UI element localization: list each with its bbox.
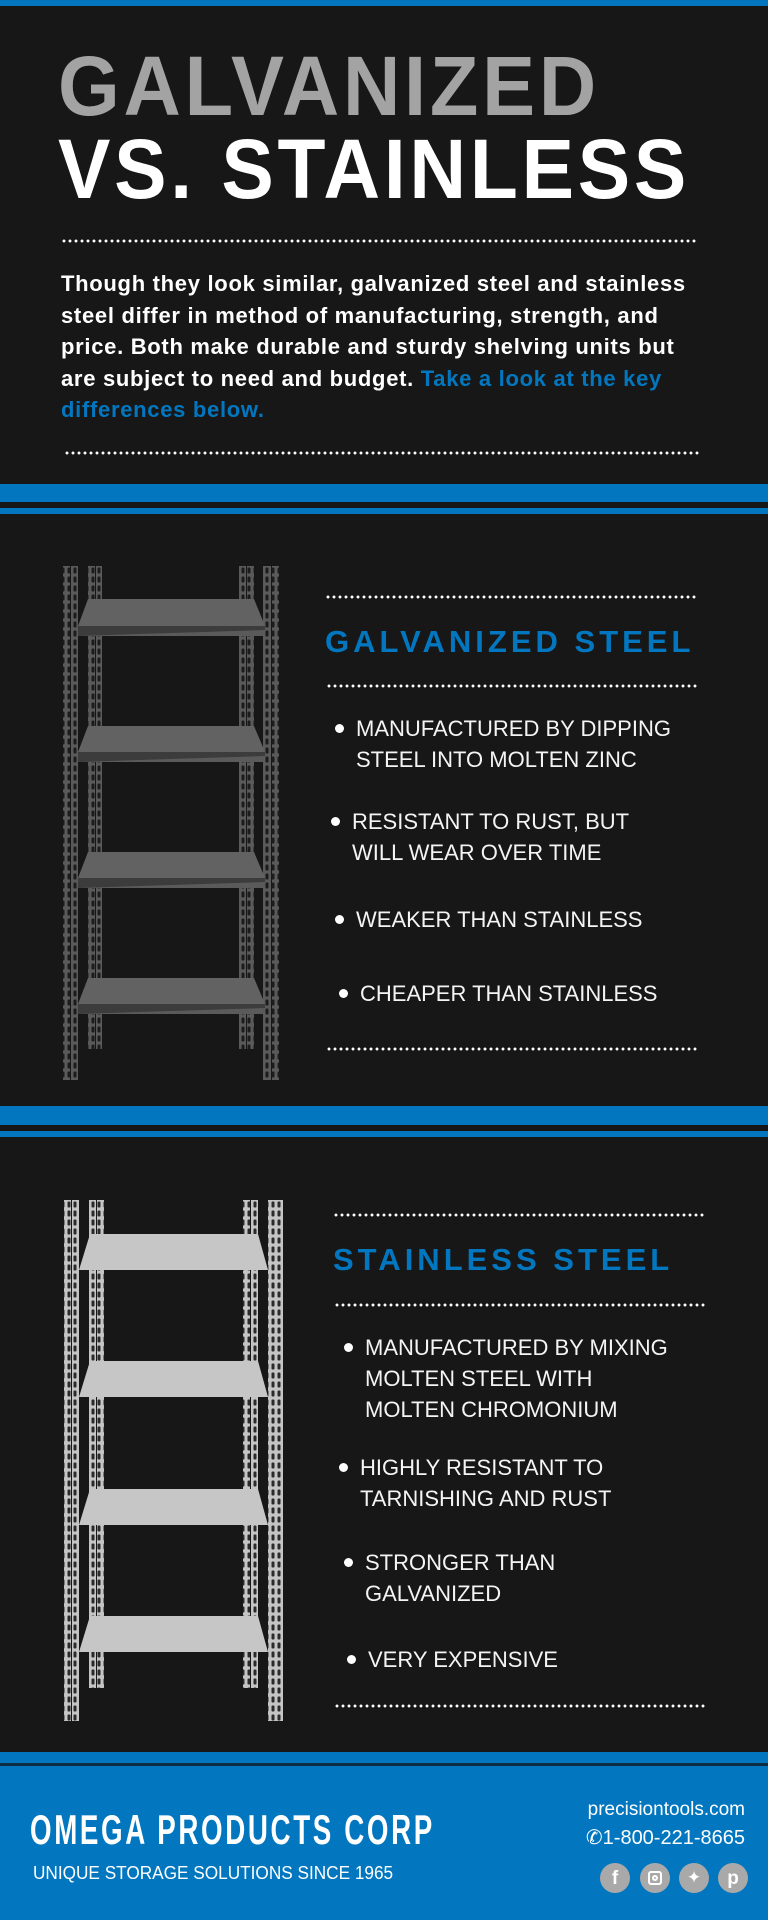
bullet: MOLTEN STEEL WITH	[365, 1366, 592, 1391]
social icons	[600, 1863, 748, 1893]
top blue bar	[0, 0, 768, 6]
heading: STAINLESS STEEL	[333, 1242, 673, 1277]
divider bars 2	[0, 1106, 768, 1125]
bullet: WEAKER THAN STAINLESS	[356, 907, 642, 932]
heading: GALVANIZED STEEL	[325, 624, 694, 659]
social icons: ✦	[687, 1868, 701, 1887]
intro paragraph: differences below.	[61, 397, 265, 422]
intro paragraph	[61, 271, 686, 422]
bullet	[365, 1547, 555, 1609]
intro paragraph: price. Both make durable and sturdy shelving units but	[61, 334, 675, 359]
phone: ✆1-800-221-8665	[586, 1827, 745, 1849]
bullet	[360, 1452, 611, 1514]
intro paragraph: Though they look similar, galvanized steel and stainless	[61, 271, 686, 296]
bullet: WILL WEAR OVER TIME	[352, 840, 601, 865]
bullet	[352, 806, 629, 868]
title: VS. STAINLESS	[58, 122, 690, 216]
bullet: MANUFACTURED BY MIXING	[365, 1335, 668, 1360]
title	[58, 39, 690, 216]
panel: stainless steel	[333, 1214, 704, 1708]
bullet: VERY EXPENSIVE	[368, 1647, 558, 1672]
intro paragraph: steel differ in method of manufacturing, strength, and	[61, 302, 659, 328]
social icons: p	[727, 1868, 739, 1889]
bullet: STEEL INTO MOLTEN ZINC	[356, 747, 637, 772]
icon: galvanized shelf	[63, 566, 283, 1721]
social icons: f	[612, 1868, 618, 1889]
bullet: MANUFACTURED BY DIPPING	[356, 716, 671, 741]
intro paragraph: are subject to need and budget. Take a look at the key	[61, 366, 662, 390]
title: GALVANIZED	[58, 39, 600, 133]
website: precisiontools.com	[588, 1799, 745, 1820]
bullet	[356, 713, 671, 775]
bullet: TARNISHING AND RUST	[360, 1486, 611, 1511]
bullet: CHEAPER THAN STAINLESS	[360, 981, 657, 1006]
bullet	[365, 1332, 668, 1425]
divider bars 1	[0, 484, 768, 502]
tagline: UNIQUE STORAGE SOLUTIONS SINCE 1965	[33, 1862, 393, 1883]
footer	[0, 1752, 768, 1920]
company name: OMEGA PRODUCTS CORP	[30, 1806, 435, 1853]
bullet: GALVANIZED	[365, 1581, 501, 1606]
bullet: MOLTEN CHROMONIUM	[365, 1397, 618, 1422]
bullet: HIGHLY RESISTANT TO	[360, 1455, 603, 1480]
bullet: STRONGER THAN	[365, 1550, 555, 1575]
bullet: RESISTANT TO RUST, BUT	[352, 809, 629, 834]
panel: galvanized steel	[325, 596, 696, 1050]
